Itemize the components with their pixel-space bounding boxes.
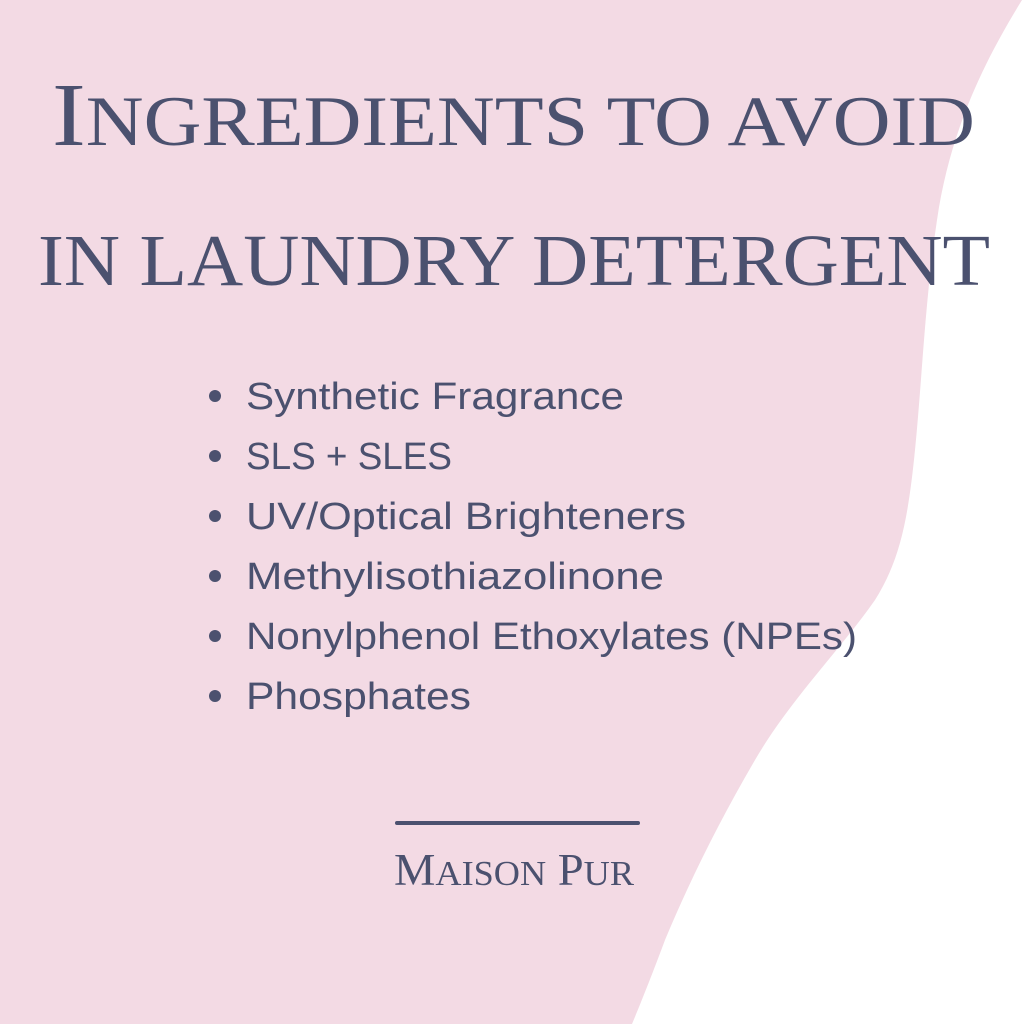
ingredient list [209,376,857,718]
brand name: MAISON PUR [394,845,635,895]
title: IN LAUNDRY DETERGENT [38,220,990,301]
title: INGREDIENTS TO AVOID [52,66,975,165]
ingredient list: UV/Optical Brighteners [246,496,686,538]
ingredient list: Synthetic Fragrance [246,376,624,418]
title [38,66,990,301]
ingredient list: Nonylphenol Ethoxylates (NPEs) [246,616,857,658]
ingredient list: Methylisothiazolinone [246,556,664,598]
ingredient list: Phosphates [246,676,471,718]
ingredient list: SLS + SLES [246,436,452,478]
divider line above brand [397,821,638,825]
